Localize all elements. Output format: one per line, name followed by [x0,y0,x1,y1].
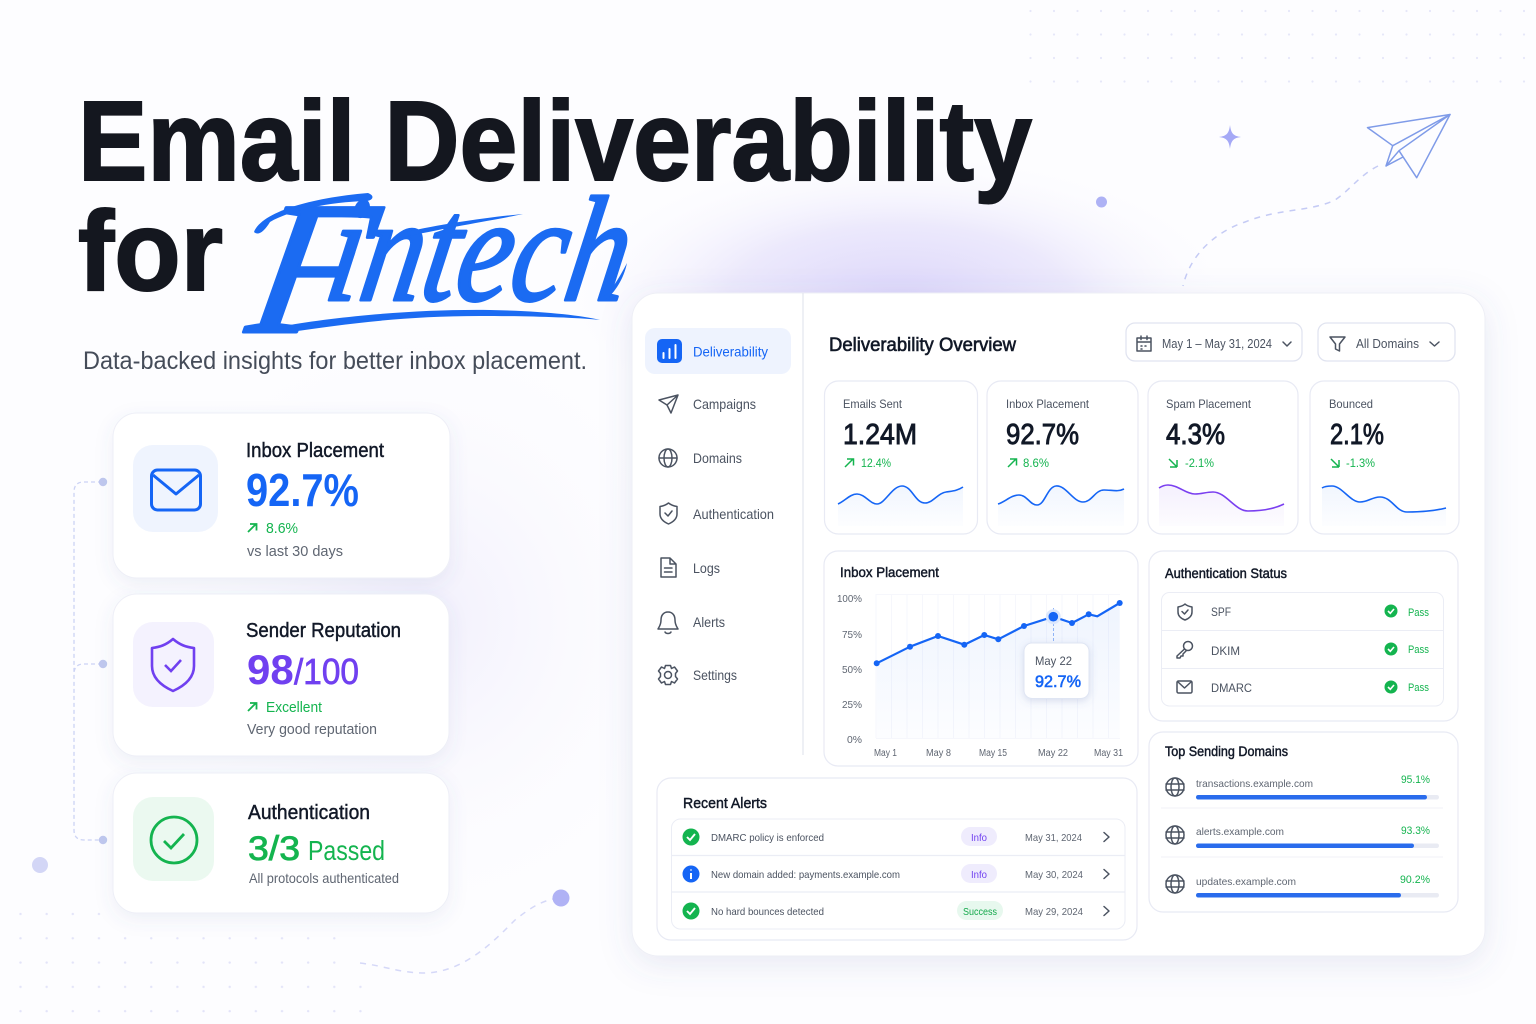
sparkle decoration [1219,125,1241,149]
alert: new domain: Info [971,869,987,881]
bottom left lilac dot [32,857,48,873]
dot decoration [1096,196,1107,208]
panel: top sending domains [1149,732,1458,912]
KPI card: Bounced [1310,381,1459,534]
KPI card: Bounced: Bounced [1329,397,1373,411]
value: 3/3 [248,830,300,868]
panel: authentication stat card [113,773,449,913]
domain filter dropdown: All Domains [1356,337,1419,351]
dashed flight path [1183,166,1378,286]
row: transactions.example.com: 95.1% [1401,774,1430,786]
row: transactions.example.com: transactions.example.com [1196,778,1313,790]
alert: DMARC policy: DMARC policy is enforced [711,832,824,844]
nav item: Authentication [660,503,774,524]
value: Passed [308,835,385,866]
subtitle: Data-backed insights for better inbox placement. [83,347,587,375]
KPI card: Emails Sent: 1.24M [843,419,917,451]
tooltip: May 22 [1035,654,1072,668]
icon: check circle [133,797,214,881]
panel: recent alerts [657,778,1137,940]
x axis labels: May 15 [979,748,1007,759]
comparison note: vs last 30 days [247,544,343,560]
alert: no hard bounces [682,901,1109,920]
heading: Authentication [248,802,370,824]
panel: inbox placement stat card [113,413,450,578]
heading: Sender Reputation [246,620,401,642]
row: DKIM: DKIM [1211,644,1240,658]
y axis labels [837,593,862,746]
nav item: Logs [661,558,720,577]
x axis labels [874,748,1123,759]
heading: Top Sending Domains [1165,744,1288,759]
nav item: Alerts [658,612,725,634]
sparkline [1322,486,1446,526]
row: DMARC: Pass [1408,682,1429,694]
value: /100 [294,651,359,692]
panel: sender reputation stat card [113,594,449,756]
title: for: for [78,188,223,314]
x axis labels: May 31 [1094,748,1123,759]
nav item: Campaigns [659,395,756,413]
row: alerts.example.com: alerts.example.com [1196,826,1284,838]
row: SPF [1178,604,1429,620]
KPI card: Emails Sent [824,381,978,534]
note: Very good reputation [247,722,377,738]
row: DMARC [1177,680,1429,695]
date range dropdown: May 1 – May 31, 2024 [1162,337,1272,351]
nav item: Logs: Logs [693,560,720,576]
sidebar navigation [645,328,791,684]
KPI card: Inbox Placement: 8.6% [1023,456,1049,470]
trend: Excellent [266,699,323,716]
trend: 8.6% [266,520,298,537]
title accent: Fintech script word with brush underline: F [235,163,392,374]
sparkline [1159,485,1284,526]
line series [874,600,1123,666]
KPI card: Emails Sent: Emails Sent [843,397,903,411]
x axis labels: May 22 [1038,748,1068,759]
title accent: Fintech script word with brush underline [235,163,646,374]
icon: shield [133,622,214,707]
alert: no hard bounces: May 29, 2024 [1025,906,1083,918]
area under line [877,603,1120,738]
nav item: Deliverability (active): Deliverability [693,344,768,360]
tooltip: 92.7% [1035,672,1081,691]
KPI card: Bounced: 2.1% [1330,419,1384,451]
alert: DMARC policy [682,827,1109,846]
dashed path bottom [360,899,553,973]
row: DKIM [1177,642,1429,658]
row: DKIM: Pass [1408,644,1429,656]
y axis labels: 25% [842,699,862,711]
KPI card: Inbox Placement: 92.7% [1006,419,1079,451]
KPI card: Bounced: -1.3% [1346,456,1375,470]
bottom purple dot [552,890,570,906]
y axis labels: 100% [837,593,862,605]
row: updates.example.com: updates.example.com [1196,876,1296,888]
icon: paper airplane [1368,114,1450,178]
value: 92.7% [246,464,359,516]
domain filter dropdown [1318,323,1455,361]
KPI card: Emails Sent: 12.4% [861,456,891,470]
row: DMARC: DMARC [1211,681,1252,695]
alert: new domain: May 30, 2024 [1025,869,1083,881]
nav item: Settings [658,666,737,684]
KPI card: Inbox Placement: Inbox Placement [1006,397,1090,411]
panel: authentication status [1149,551,1458,721]
plot grid [876,594,1120,738]
heading: Authentication Status [1165,566,1287,581]
x axis labels: May 8 [926,748,951,759]
row: updates.example.com [1166,874,1439,898]
KPI card: Spam Placement: 4.3% [1166,419,1225,451]
panel: inbox placement line chart [824,551,1138,766]
trend [248,520,298,537]
row: SPF: Pass [1408,607,1429,619]
tooltip [1024,643,1089,698]
alert: DMARC policy: Info [971,832,987,844]
nav item: Campaigns: Campaigns [693,396,756,412]
row: alerts.example.com: 93.3% [1401,825,1430,837]
nav item: Domains [659,449,742,467]
sparkline [998,486,1124,526]
alert: DMARC policy: May 31, 2024 [1025,832,1082,844]
alert: new domain: New domain added: payments.example.com [711,869,900,881]
row: SPF: SPF [1211,605,1231,619]
alert: no hard bounces: Success [963,906,997,918]
heading: Deliverability Overview: Deliverability Overview [829,335,1016,356]
panel: dashboard [632,293,1485,956]
title: Email Deliverability: Email Deliverability [78,78,1032,204]
row: alerts.example.com [1166,825,1439,848]
highlighted point [1046,608,1061,643]
connector between stat cards [74,478,107,844]
icon: envelope [133,445,218,532]
title accent: Fintech script word with brush underline: intech [316,166,646,333]
value: 98 [247,646,294,693]
row: updates.example.com: 90.2% [1400,874,1430,886]
nav item: Alerts: Alerts [693,614,725,630]
nav item: Settings: Settings [693,667,737,683]
y axis labels: 75% [842,629,862,641]
x axis labels: May 1 [874,748,897,759]
KPI card: Inbox Placement [987,381,1138,534]
heading: Inbox Placement [246,440,384,462]
nav item: Deliverability (active) [645,328,791,374]
KPI card: Spam Placement: Spam Placement [1166,397,1252,411]
note: All protocols authenticated [249,870,399,886]
nav item: Authentication: Authentication [693,506,774,522]
KPI card: Spam Placement: -2.1% [1185,456,1214,470]
row: transactions.example.com [1166,774,1439,800]
heading: Recent Alerts [683,796,767,812]
chart heading: Inbox Placement [840,564,939,580]
alert: no hard bounces: No hard bounces detected [711,906,824,918]
date range dropdown [1126,323,1302,361]
KPI card: Spam Placement [1148,381,1298,534]
y axis labels: 0% [847,734,862,746]
sparkline [838,486,963,526]
y axis labels: 50% [842,664,862,676]
alert: new domain [682,864,1109,883]
nav item: Domains: Domains [693,450,742,466]
